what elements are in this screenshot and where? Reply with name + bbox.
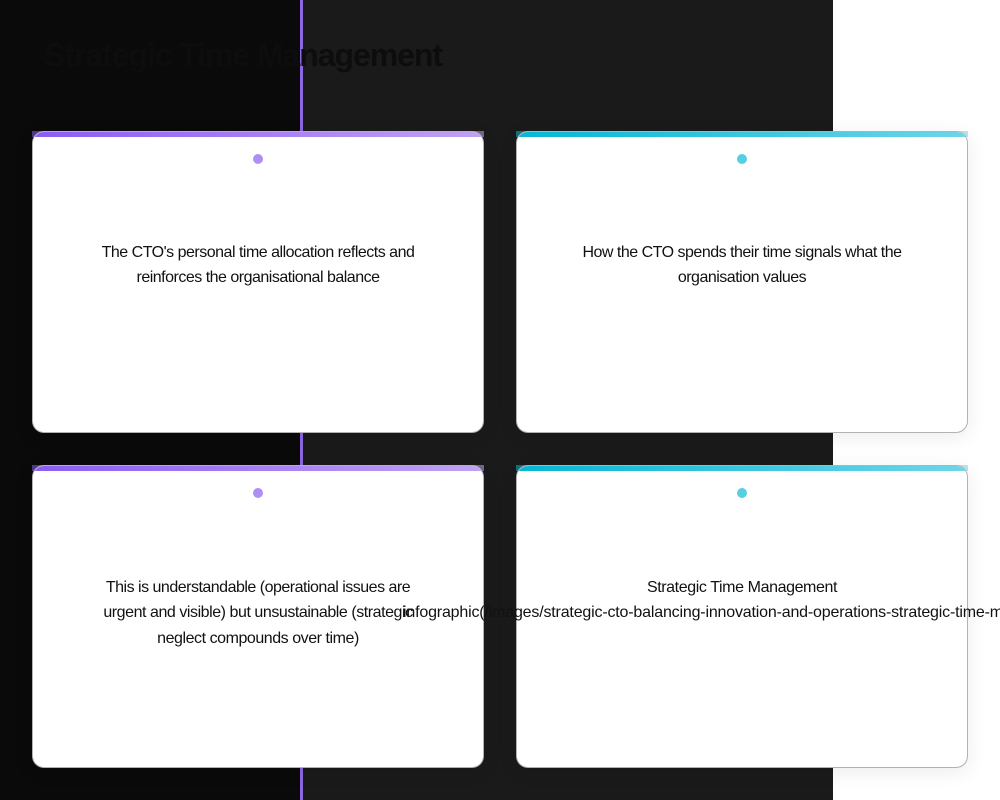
text: time signals: How the CTO spends their time signals what the: [582, 244, 902, 261]
text: time allocation: [102, 244, 414, 286]
accent bar: [32, 131, 484, 137]
text: operational neglect: urgent and visible) but unsustainable (strategic: [103, 604, 413, 621]
accent bar: [516, 465, 968, 471]
text: time allocation: reinforces the organisational balance: [136, 269, 380, 286]
card body: [32, 465, 484, 768]
panel: time allocation card: [32, 131, 484, 437]
accent bar corners: [32, 131, 484, 137]
card body: [516, 131, 968, 433]
accent bar corners: [516, 465, 968, 471]
accent bar: [32, 465, 484, 471]
text: card heading: Strategic Time Management: [647, 579, 837, 596]
background: left dark band: [0, 0, 300, 800]
accent bar corners: [32, 465, 484, 471]
card body: [516, 465, 968, 768]
dot marker: [737, 154, 747, 164]
panel: time signals card: [516, 131, 970, 438]
background: main dark band: [303, 0, 833, 800]
text: operational neglect: [103, 579, 413, 647]
text: time signals: [582, 244, 902, 286]
text: time signals: organisation values: [678, 269, 806, 286]
text: time allocation: The CTO's personal time allocation reflects and: [102, 244, 414, 261]
panel: operational neglect card: [32, 465, 484, 772]
text: operational neglect: This is understandable (operational issues are: [106, 579, 410, 596]
dot marker: [737, 488, 747, 498]
accent bar corners: [516, 131, 968, 137]
dot marker: [253, 488, 263, 498]
text: operational neglect: neglect compounds over time): [157, 630, 359, 647]
panel: image reference card: [516, 465, 970, 774]
accent bar: [516, 131, 968, 137]
title: Strategic Time Management: [44, 37, 442, 73]
card body: [32, 131, 484, 433]
vertical timeline line: [300, 0, 303, 800]
dot marker: [253, 154, 263, 164]
